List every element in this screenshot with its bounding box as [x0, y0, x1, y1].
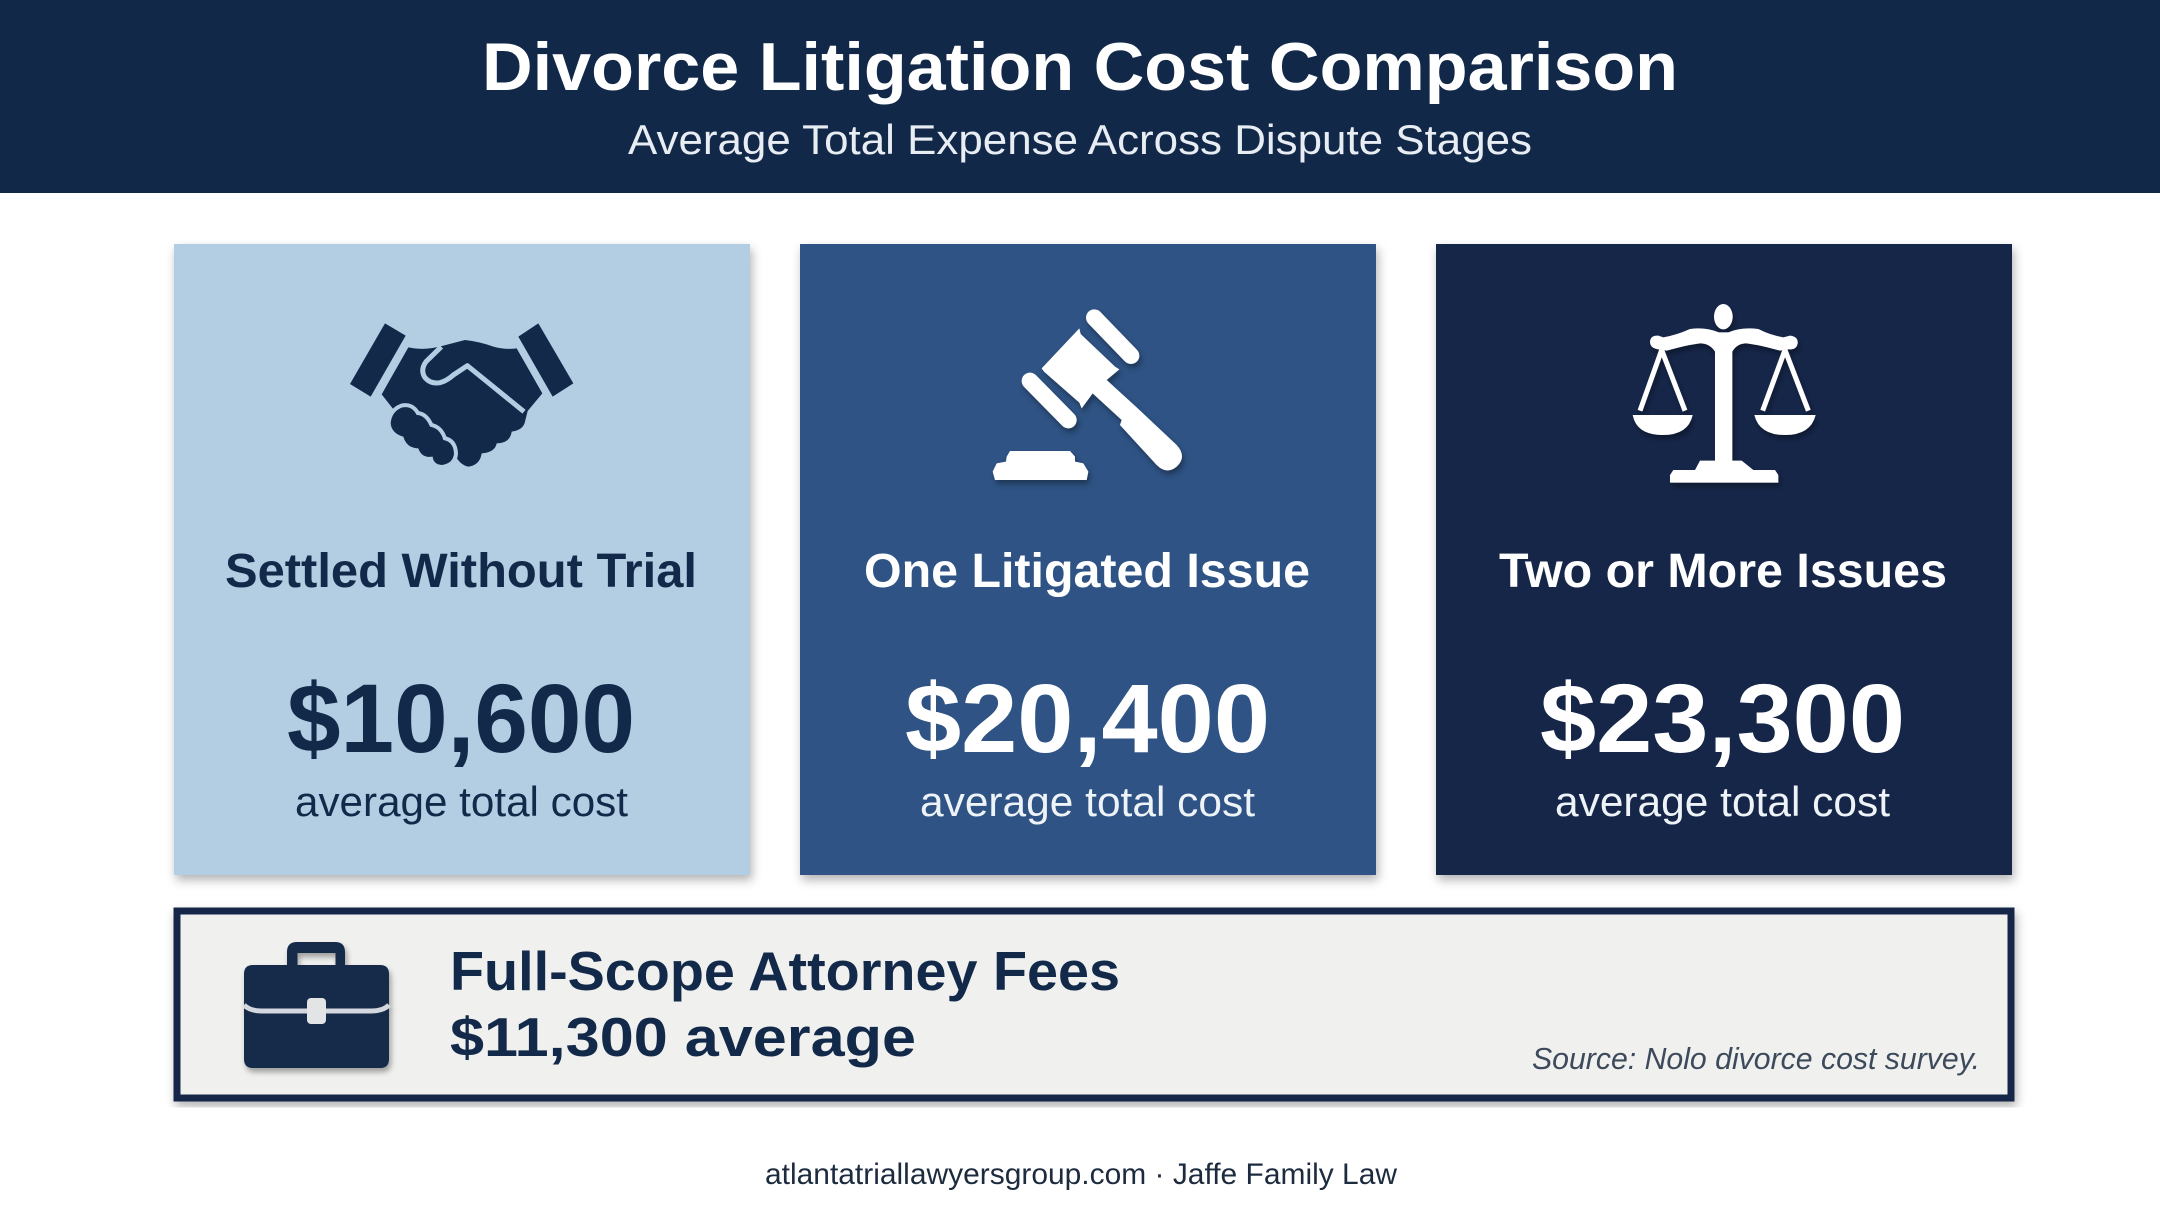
card heading: Two or More Issues: [1499, 545, 1947, 598]
icon: gavel: [993, 318, 1182, 480]
banner amount: $11,300 average: [450, 1006, 916, 1068]
footer credit: atlantatriallawyersgroup.com · Jaffe Family Law: [765, 1158, 1397, 1191]
panel: attorney fees banner: [177, 911, 2011, 1098]
icon: scales of justice: [1633, 304, 1816, 483]
subtitle: Average Total Expense Across Dispute Stages: [628, 116, 1532, 163]
amount: $10,600: [287, 664, 635, 773]
caption: average total cost: [1555, 778, 1890, 825]
panel: one litigated issue: [800, 244, 1376, 875]
panel: two or more issues: [1436, 244, 2012, 875]
source note: Source: Nolo divorce cost survey.: [1532, 1041, 1980, 1076]
header band: [0, 0, 2160, 193]
amount: $23,300: [1540, 664, 1905, 773]
icon: handshake: [350, 323, 573, 467]
title: Divorce Litigation Cost Comparison: [482, 29, 1678, 105]
card heading: Settled Without Trial: [225, 545, 697, 598]
caption: average total cost: [295, 778, 628, 825]
panel: settled without trial: [174, 244, 750, 875]
icon: briefcase: [244, 942, 389, 1068]
caption: average total cost: [920, 778, 1255, 825]
card heading: One Litigated Issue: [864, 545, 1310, 598]
amount: $20,400: [905, 664, 1270, 773]
banner heading: Full-Scope Attorney Fees: [450, 940, 1120, 1002]
